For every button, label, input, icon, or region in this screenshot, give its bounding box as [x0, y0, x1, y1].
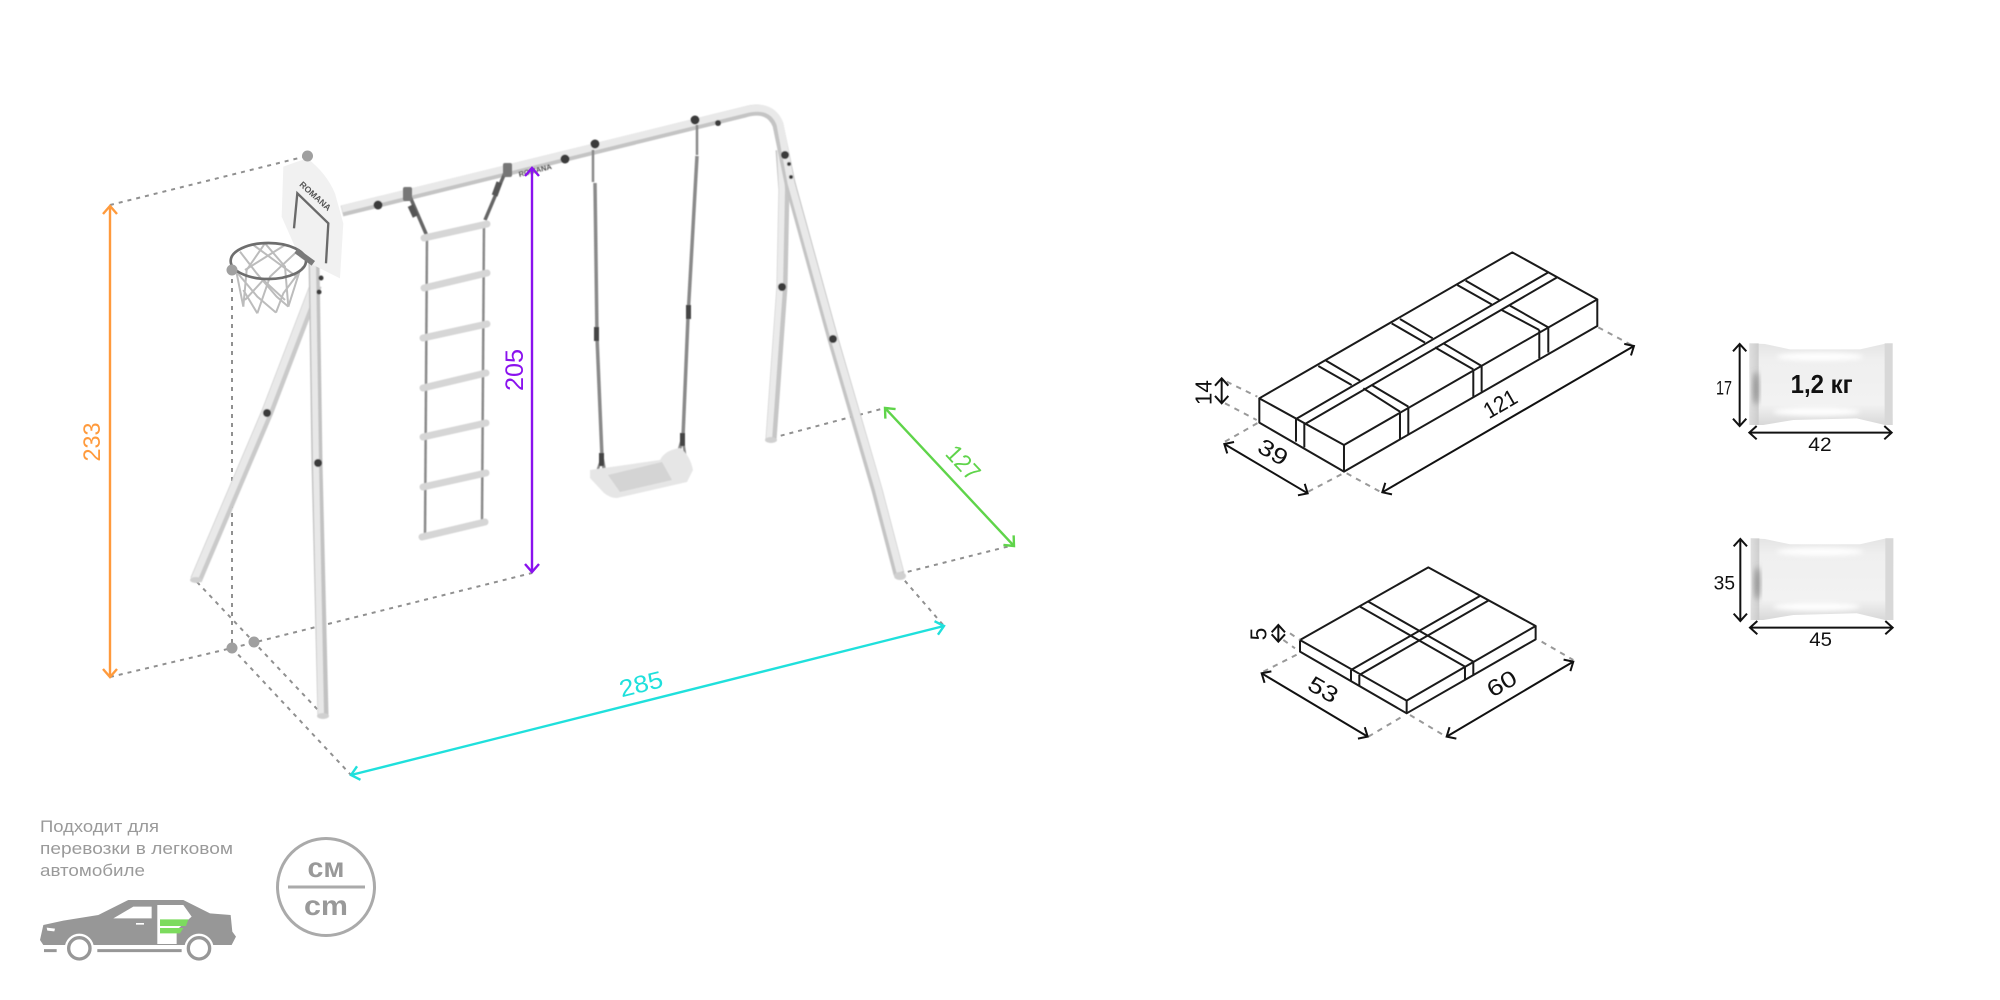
swing rope fittings	[594, 305, 691, 466]
bag 1 dimension labels: 17	[1716, 379, 1732, 400]
transport note: автомобиле	[40, 861, 145, 880]
dimension: width 285	[351, 626, 944, 775]
car windows and door	[47, 905, 214, 963]
bags with arrows	[1714, 343, 1893, 651]
units badge: cm: cm	[304, 890, 348, 921]
rim bracket	[296, 251, 313, 263]
bag 2 dimension labels	[1714, 574, 1832, 651]
ladder rungs	[422, 224, 487, 537]
flat box dimension labels	[1245, 628, 1521, 708]
frame bolts	[263, 116, 837, 467]
swing ropes	[593, 125, 697, 485]
dotted guide lines	[110, 156, 1014, 775]
package 2: flat box	[1245, 567, 1573, 737]
bag 1 dimension labels	[1716, 379, 1832, 456]
car body	[40, 900, 236, 945]
guide dots	[226, 150, 313, 654]
car wheels and ground line	[44, 938, 210, 959]
flat box dimension labels: 60	[1482, 664, 1521, 702]
flat box outline	[1300, 567, 1536, 713]
bag 1	[1749, 343, 1893, 425]
transport note	[40, 817, 233, 880]
bag 1 dimension labels: 42	[1808, 435, 1832, 456]
units badge: cm	[278, 838, 374, 936]
box dimension labels: 14	[1190, 380, 1216, 405]
bag 2	[1751, 538, 1893, 620]
left vertical leg	[313, 262, 323, 715]
units badge: cm: см	[308, 852, 344, 883]
box dashed guides	[1225, 327, 1633, 492]
bag 2 dimensions	[1740, 539, 1893, 628]
backboard	[282, 158, 343, 278]
bag 2 dimension labels: 35	[1714, 574, 1735, 595]
dimension: height 233: 233	[79, 422, 106, 462]
ladder ropes and straps	[408, 168, 507, 537]
backboard: ROMANA	[298, 179, 334, 213]
dimension: width 285: 285	[617, 666, 666, 703]
box dimension labels: 39	[1253, 433, 1293, 471]
beam brand text: ROMANA	[518, 162, 553, 179]
dimension: depth 127: 127	[940, 440, 985, 486]
box dimension labels: 121	[1478, 384, 1522, 424]
swing	[590, 125, 697, 498]
dimension: height 205: 205	[501, 349, 529, 391]
flat box dashed guides	[1263, 633, 1573, 737]
bag 1 weight label: 1,2 кг	[1791, 369, 1853, 399]
ladder clamps	[403, 163, 512, 218]
flat box dimension labels: 5	[1245, 628, 1271, 640]
bag 2 dimension labels: 45	[1809, 630, 1832, 651]
flat box dimension arrows	[1262, 625, 1573, 737]
icon: car with packages	[40, 900, 236, 963]
rim	[231, 243, 306, 279]
box outline	[1259, 252, 1597, 472]
bag 1 dimensions	[1740, 344, 1892, 433]
packages inside the car	[160, 919, 188, 933]
back right leg	[769, 150, 784, 440]
net	[235, 243, 303, 313]
foot caps	[190, 437, 906, 719]
transport note: перевозки в легковом	[40, 839, 233, 858]
dimension: depth 127	[885, 408, 1014, 546]
top beam and front right leg	[342, 108, 900, 574]
swing set frame	[190, 108, 906, 719]
swing seat	[590, 448, 693, 498]
flat box dimension labels: 53	[1304, 670, 1343, 708]
box dimension labels	[1190, 380, 1522, 471]
transport note: Подходит для	[40, 817, 159, 836]
box dimension arrows	[1222, 346, 1634, 493]
left diagonal leg	[194, 285, 316, 580]
ladder	[403, 163, 512, 537]
package 1: long box	[1190, 252, 1634, 493]
basketball hoop	[231, 158, 343, 313]
